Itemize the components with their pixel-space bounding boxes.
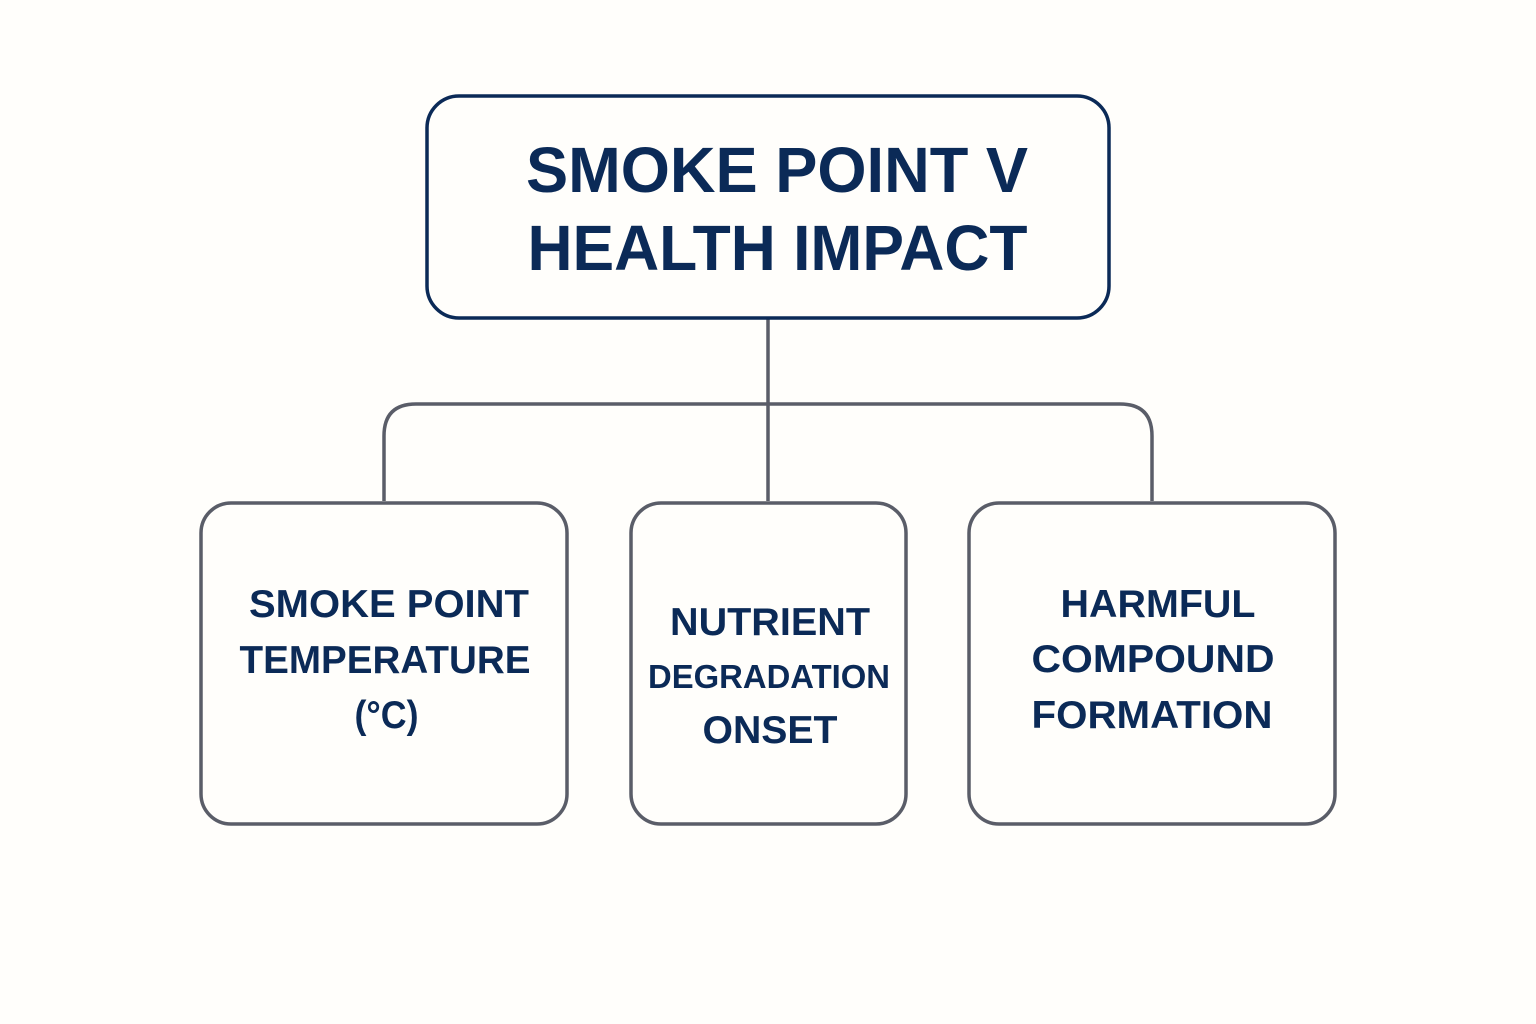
panel: nutrient degradation onset: [631, 503, 906, 824]
panel text: HARMFUL: [1060, 583, 1256, 626]
panel text: TEMPERATURE: [240, 639, 530, 682]
panel text: DEGRADATION: [648, 658, 890, 695]
panel text: (°C): [354, 694, 418, 737]
title text: [526, 134, 1028, 284]
panel text: [648, 601, 890, 752]
title text: SMOKE POINT V: [526, 134, 1028, 206]
panel text: FORMATION: [1032, 694, 1272, 737]
panel text: [240, 583, 530, 737]
panel text: [1032, 583, 1274, 737]
panel text: ONSET: [702, 709, 838, 752]
panel: harmful compound formation: [969, 503, 1335, 824]
panel: smoke point temperature: [201, 503, 567, 824]
panel text: SMOKE POINT: [249, 583, 529, 626]
title box: [427, 96, 1109, 318]
panel text: COMPOUND: [1032, 638, 1274, 681]
connector lines: [384, 318, 1152, 501]
title text: HEALTH IMPACT: [528, 212, 1028, 284]
panel text: NUTRIENT: [670, 601, 870, 644]
